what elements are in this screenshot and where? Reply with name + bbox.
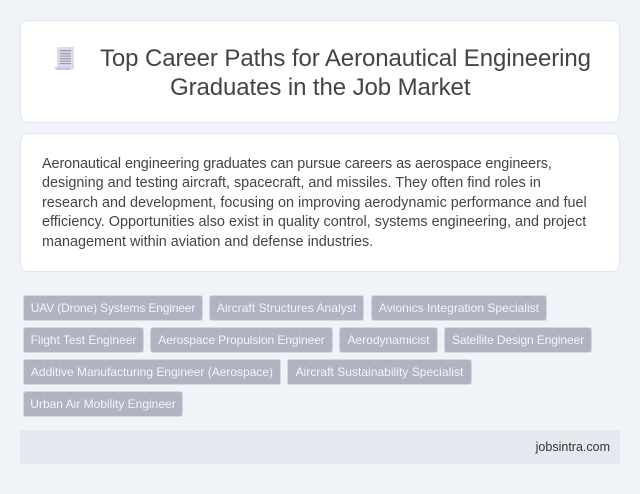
tag: Additive Manufacturing Engineer (Aerospace) — [31, 365, 273, 379]
tag — [23, 359, 281, 385]
description text: designing and testing aircraft, spacecraft, and missiles. They often find roles in — [42, 175, 541, 191]
career tags — [23, 295, 592, 417]
description text — [42, 156, 587, 250]
tag — [23, 295, 203, 321]
tag: Flight Test Engineer — [31, 333, 136, 347]
tag — [371, 295, 547, 321]
title — [100, 45, 591, 101]
panel: description card — [20, 133, 620, 272]
footer bar — [20, 430, 620, 464]
tag — [444, 327, 592, 353]
description text: research and development, focusing on improving aerodynamic performance and fuel — [42, 195, 587, 211]
tag: Urban Air Mobility Engineer — [30, 397, 176, 411]
tag — [287, 359, 472, 385]
title: Top Career Paths for Aeronautical Engineering — [100, 45, 591, 72]
title: Graduates in the Job Market — [170, 74, 470, 101]
tag: Satellite Design Engineer — [452, 333, 584, 347]
tag — [209, 295, 364, 321]
description text: Aeronautical engineering graduates can pursue careers as aerospace engineers, — [42, 156, 552, 172]
description text: management within aviation and defense industries. — [42, 234, 373, 250]
tag — [23, 391, 183, 417]
tag — [23, 327, 144, 353]
footer source text: jobsintra.com — [536, 440, 610, 454]
tag: UAV (Drone) Systems Engineer — [31, 301, 195, 315]
panel: header card — [20, 20, 620, 123]
icon: document scroll — [55, 47, 74, 70]
tag: Aerospace Propulsion Engineer — [158, 333, 325, 347]
tag: Aircraft Structures Analyst — [217, 301, 356, 315]
tag: Aerodynamicist — [347, 333, 430, 347]
tag — [150, 327, 333, 353]
tag: Aircraft Sustainability Specialist — [296, 365, 463, 379]
description text: efficiency. Opportunities also exist in quality control, systems engineering, and project — [42, 214, 586, 230]
tag: Avionics Integration Specialist — [379, 301, 539, 315]
tag — [339, 327, 438, 353]
